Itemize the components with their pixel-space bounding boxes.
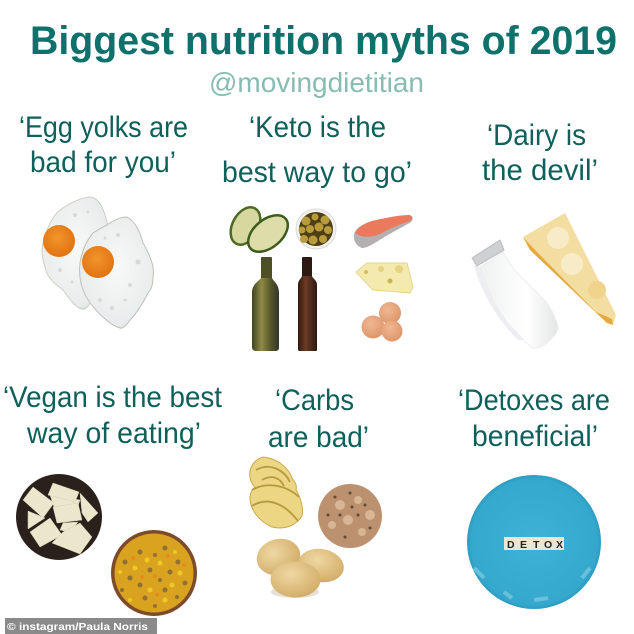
heading: keto: best way to go’ [222,156,412,189]
heading: detox [458,384,610,453]
icon: eggs [362,302,402,342]
handle: @movingdietitian [209,67,424,98]
heading: carbs: are bad’ [268,421,369,454]
credit badge [5,618,157,634]
icon: fried eggs [42,197,153,328]
heading: dairy [482,119,598,187]
panel: dairy [472,119,616,348]
heading: egg yolks: bad for you’ [30,146,176,179]
panel: egg yolks [19,111,188,328]
icon: pasta [250,457,303,528]
icon: tofu bowl [16,474,102,560]
heading: vegan [3,381,223,450]
panel: carbs [250,384,382,598]
heading: egg yolks [19,111,188,179]
panel: vegan [3,381,223,616]
heading: detox: beneficial’ [472,420,598,453]
icon: lentil bowl [111,530,197,616]
icon: olives [296,209,336,249]
icon: salmon [354,215,413,248]
credit badge: © instagram/Paula Norris [7,621,148,633]
heading: vegan: ‘Vegan is the best [3,381,223,414]
heading: carbs [268,384,369,454]
icon: avocados [225,202,295,259]
title: Biggest nutrition myths of 2019 [30,19,617,63]
heading: carbs: ‘Carbs [275,384,354,417]
icon: wedge of cheese [523,213,616,325]
icon: cheese [356,263,413,293]
icon: oil bottles [252,257,317,351]
heading: dairy: ‘Dairy is [487,119,586,152]
icon: bread roll [318,484,382,548]
panel: detox [458,384,610,609]
icon: milk bottle [472,240,558,348]
heading: dairy: the devil’ [482,154,598,187]
panel: keto [222,111,413,351]
icon: potatoes [253,534,347,598]
heading: keto [222,111,412,189]
icon: blue plate [467,475,601,609]
heading: detox: ‘Detoxes are [458,384,610,417]
icon: detox tiles: DETOX [507,539,563,551]
heading: keto: ‘Keto is the [249,111,386,144]
heading: egg yolks: ‘Egg yolks are [19,111,188,144]
heading: vegan: way of eating’ [26,417,201,450]
